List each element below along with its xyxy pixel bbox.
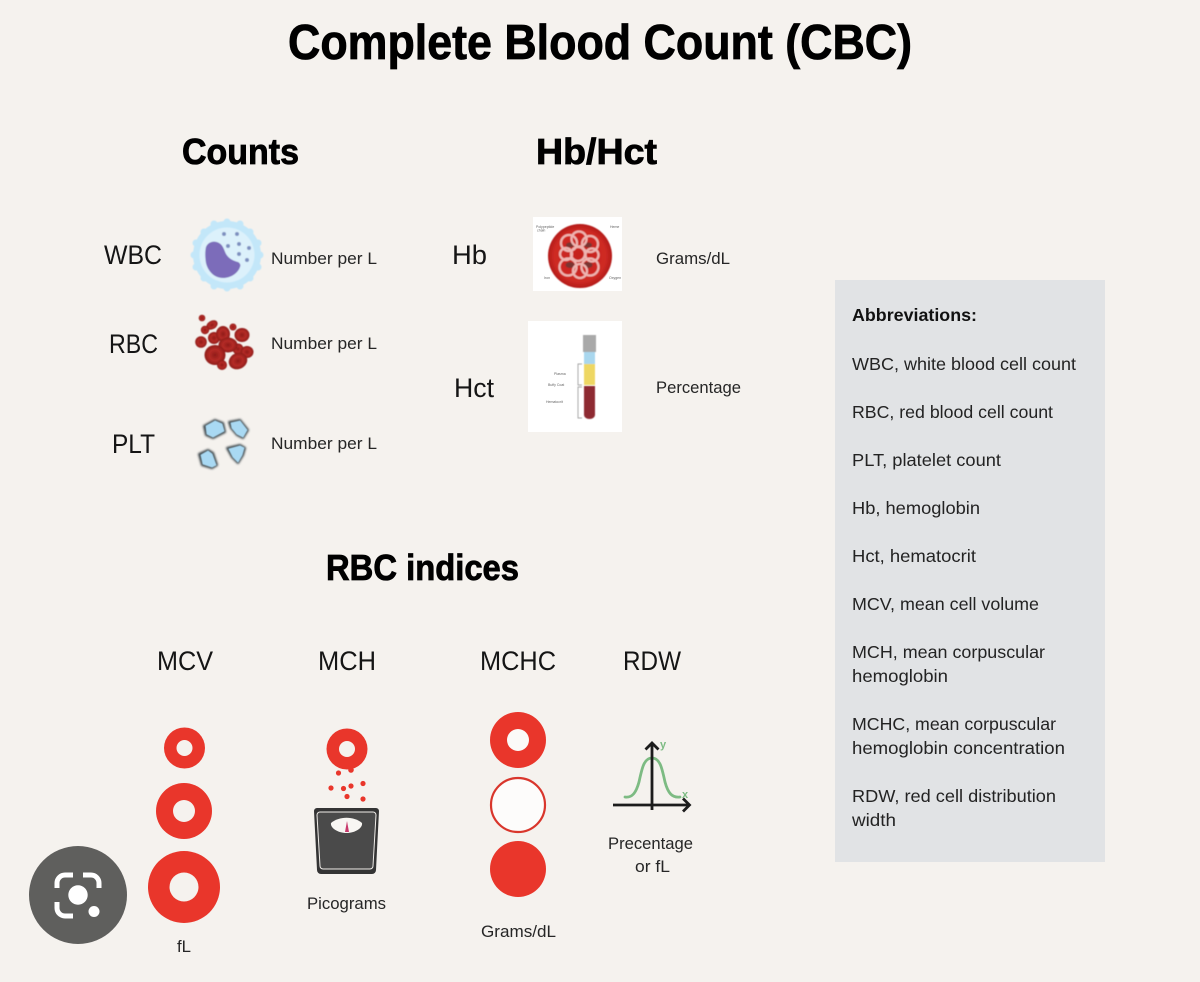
heading: abbreviations: Abbreviations:	[852, 305, 977, 325]
text: RDW unit	[608, 835, 693, 876]
column: MCH	[307, 646, 386, 913]
chart: distribution curve	[613, 739, 690, 812]
label: RDW: RDW	[623, 646, 681, 676]
text: PLT unit: Number per L	[271, 435, 377, 453]
icon: pale cell	[491, 778, 545, 832]
text: WBC unit: Number per L	[271, 250, 377, 268]
text: MCHC definition: MCHC, mean corpuscular	[852, 714, 1056, 734]
icon: hemoglobin image: Polypeptide	[536, 225, 554, 229]
chart: distribution curve: y	[660, 739, 667, 751]
text: MCHC unit: Grams/dL	[481, 923, 556, 941]
label: MCV: MCV	[157, 646, 213, 676]
icon: small cell	[164, 728, 205, 768]
text: Hct definition: Hct, hematocrit	[852, 546, 976, 566]
label: MCH: MCH	[318, 646, 376, 676]
icon: hematocrit tube image: Hematocrit	[546, 400, 563, 404]
label: MCHC: MCHC	[480, 646, 556, 676]
icon: lens button overlay	[29, 846, 127, 944]
icon: normal cell	[490, 712, 546, 768]
icon: white blood cell	[190, 218, 264, 292]
icon: hemoglobin image: Iron	[544, 276, 550, 280]
text: MCH definition: hemoglobin	[852, 666, 948, 686]
text: WBC definition: WBC, white blood cell count	[852, 354, 1076, 374]
text: MCH definition	[852, 642, 1045, 686]
icon: solid cell	[490, 841, 546, 897]
text: MCH definition: MCH, mean corpuscular	[852, 642, 1045, 662]
panel: abbreviations	[835, 280, 1105, 862]
text: Hct unit: Percentage	[656, 379, 741, 397]
panel: Hb/Hct rows	[452, 217, 741, 432]
icon: medium cell	[156, 783, 212, 839]
icon: large cell	[148, 851, 220, 923]
text: RDW unit: Precentage	[608, 835, 693, 853]
column: MCHC	[480, 646, 556, 941]
text: RBC definition: RBC, red blood cell count	[852, 402, 1053, 422]
text: Hb definition: Hb, hemoglobin	[852, 498, 980, 518]
label: Hct: Hct	[454, 373, 494, 403]
text: Hb unit: Grams/dL	[656, 250, 730, 268]
text: MCH unit: Picograms	[307, 895, 386, 913]
label: RBC: RBC	[109, 329, 158, 359]
icon: hemoglobin image: Heme	[610, 225, 619, 229]
icon: platelets	[199, 420, 248, 468]
column: RDW	[608, 646, 693, 876]
icon: hematocrit tube image	[528, 321, 622, 432]
heading: Counts: Counts	[182, 131, 299, 172]
text: RDW definition	[851, 786, 1056, 830]
label: PLT: PLT	[112, 429, 155, 459]
label: Hb: Hb	[452, 240, 487, 270]
icon: hemoglobin image	[533, 217, 622, 291]
text: MCHC definition	[852, 714, 1065, 758]
column: MCV	[148, 646, 220, 956]
text: RDW definition: width	[851, 810, 896, 830]
icon: hematocrit tube image: Buffy Coat	[548, 383, 564, 387]
icon: cell shedding dots	[326, 728, 368, 802]
text: MCV unit: fL	[177, 938, 191, 956]
text: RDW unit: or fL	[635, 858, 670, 876]
icon: hemoglobin image: chain	[537, 228, 545, 232]
text: RBC unit: Number per L	[271, 335, 377, 353]
text: MCV definition: MCV, mean cell volume	[852, 594, 1039, 614]
heading: RBC indices: RBC indices	[326, 547, 519, 588]
text: PLT definition: PLT, platelet count	[852, 450, 1001, 470]
icon: red blood cells	[195, 315, 254, 372]
label: WBC: WBC	[104, 240, 162, 270]
heading: Hb/Hct: Hb/Hct	[536, 131, 657, 172]
text: RDW definition: RDW, red cell distribution	[852, 786, 1056, 806]
chart: distribution curve: x	[682, 789, 689, 801]
title: Complete Blood Count (CBC)	[288, 16, 912, 70]
icon: hematocrit tube image: Plasma	[554, 372, 566, 376]
icon: weighing scale	[314, 808, 379, 874]
panel: counts rows	[104, 218, 377, 468]
icon: hemoglobin image: Oxygen	[609, 276, 621, 280]
text: MCHC definition: hemoglobin concentration	[852, 738, 1065, 758]
